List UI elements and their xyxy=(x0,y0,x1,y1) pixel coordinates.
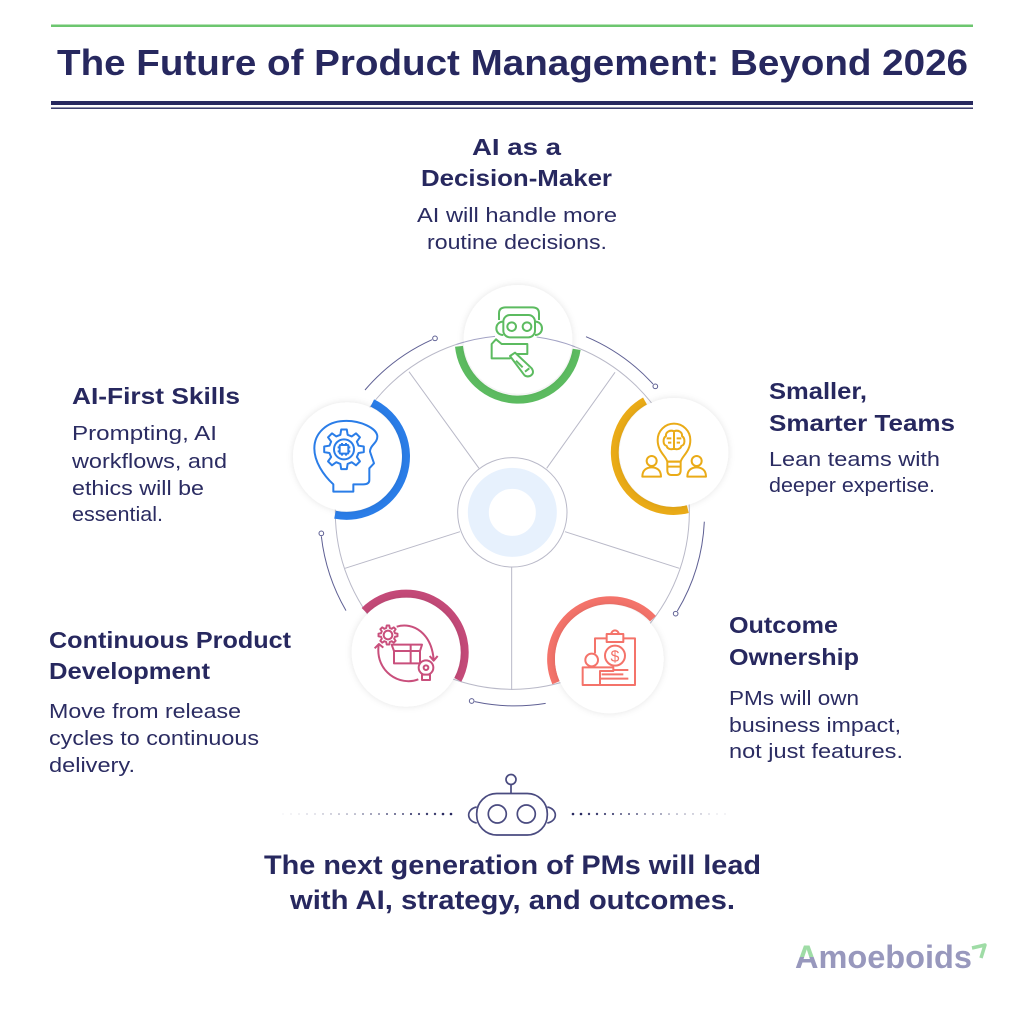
heading: Decision-Maker xyxy=(421,165,612,191)
heading xyxy=(729,612,859,670)
top accent line xyxy=(51,24,973,27)
heading: Smarter Teams xyxy=(769,410,955,436)
body text xyxy=(49,701,259,777)
dotted line right xyxy=(572,813,726,815)
icon: brain bulb with people xyxy=(642,424,706,477)
heading xyxy=(421,134,612,191)
body text: ethics will be xyxy=(72,478,204,500)
dotted line left xyxy=(283,813,452,815)
body text xyxy=(417,205,617,254)
body text xyxy=(729,688,903,763)
title double rule xyxy=(51,101,973,109)
body text: essential. xyxy=(72,504,163,526)
body text: cycles to continuous xyxy=(49,728,259,750)
icon: clipboard with dollar: $ xyxy=(611,648,620,665)
body text xyxy=(71,423,227,526)
panel: Continuous Product Development xyxy=(49,627,291,777)
heading: AI-First Skills xyxy=(72,383,240,409)
body text: business impact, xyxy=(729,715,901,737)
heading: Smaller, xyxy=(769,378,867,404)
body text: routine decisions. xyxy=(427,232,607,254)
icon: green arrow xyxy=(972,945,985,958)
body text: not just features. xyxy=(729,741,903,763)
body text: workflows, and xyxy=(71,451,227,473)
panel: Smaller, Smarter Teams xyxy=(769,378,955,497)
wheel ring crossing the node xyxy=(457,336,575,347)
heading: Outcome xyxy=(729,612,838,638)
body text xyxy=(769,449,940,497)
icon: head with gear xyxy=(314,421,377,492)
robot divider xyxy=(283,774,726,835)
title: The Future of Product Management: Beyond 2026 xyxy=(57,42,968,83)
panel: AI as a Decision-Maker xyxy=(417,134,617,254)
heading: AI as a xyxy=(472,134,561,160)
closing statement xyxy=(264,850,761,915)
outer wheel ring and spokes xyxy=(335,335,689,690)
wheel diagram xyxy=(293,285,728,713)
icon: robot head xyxy=(469,774,555,835)
node: blue AI-first skills xyxy=(293,402,406,516)
icon: product cycle xyxy=(375,625,438,681)
icon: robot with chat bubble and pencil xyxy=(492,307,542,376)
body text: Move from release xyxy=(49,701,241,723)
closing statement: The next generation of PMs will lead xyxy=(264,850,761,880)
heading: Continuous Product xyxy=(49,627,291,653)
body text: delivery. xyxy=(49,755,135,777)
centre hub xyxy=(458,458,567,567)
body text: Lean teams with xyxy=(769,449,940,471)
node: green decision maker xyxy=(457,285,577,400)
panel: AI-First Skills xyxy=(71,383,240,526)
panel: Outcome Ownership xyxy=(729,612,903,763)
heading xyxy=(49,627,291,684)
body text: deeper expertise. xyxy=(769,475,935,497)
body text: AI will handle more xyxy=(417,205,617,227)
body text: Prompting, AI xyxy=(72,423,217,445)
body text: PMs will own xyxy=(729,688,859,710)
logo: Amoeboids: Amoeboids xyxy=(795,939,972,975)
heading xyxy=(769,378,955,436)
heading: Development xyxy=(49,658,210,684)
closing statement: with AI, strategy, and outcomes. xyxy=(289,885,735,915)
outer thin arcs with end dots xyxy=(319,336,704,706)
node: yellow smaller teams xyxy=(615,398,728,511)
heading: Ownership xyxy=(729,644,859,670)
node: coral outcome ownership xyxy=(551,600,664,713)
node: pink continuous development xyxy=(352,594,465,707)
